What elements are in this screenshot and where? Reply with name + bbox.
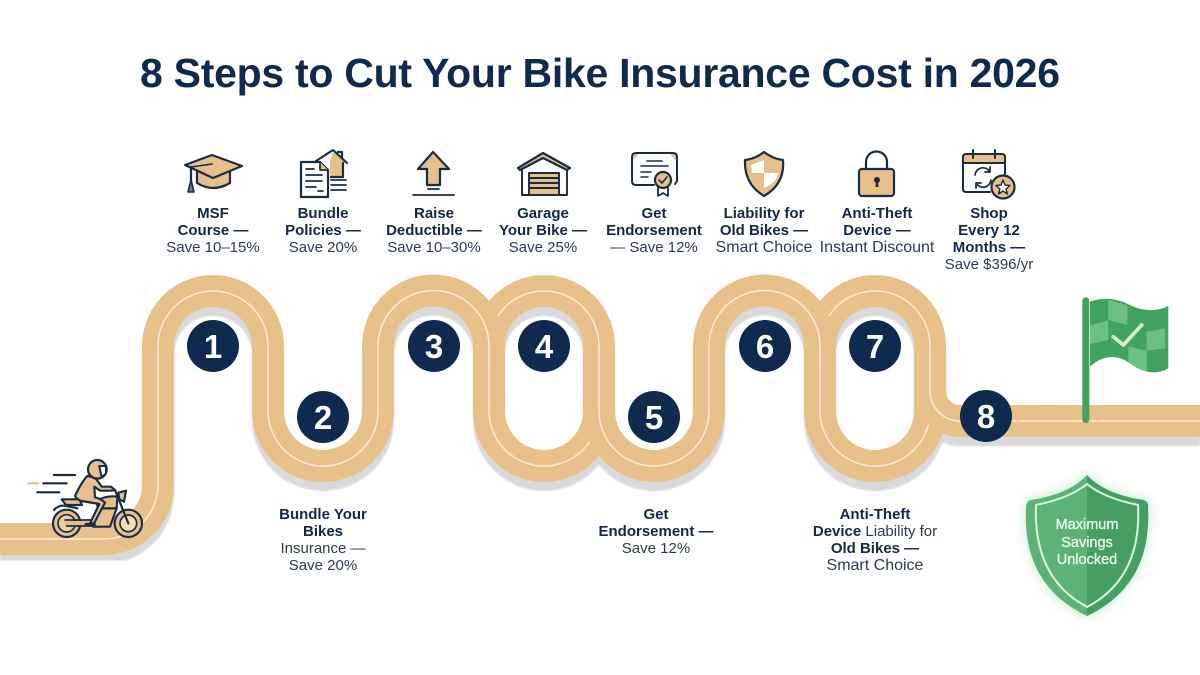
step marker 6 [739, 320, 791, 372]
label: step 5 top: Endorsement [606, 222, 702, 239]
label: step 3: Deductible — [386, 222, 482, 239]
step marker 7: 7 [866, 328, 884, 365]
label: anti-theft and liability: Anti-Theft [840, 506, 910, 523]
step marker 4: 4 [535, 328, 554, 365]
step marker 5: 5 [645, 399, 663, 436]
icon: finish flag [1082, 297, 1168, 423]
icon: garage [518, 153, 570, 195]
label: step 2 top: Policies — [285, 222, 361, 239]
step marker 3 [408, 320, 460, 372]
label: step 1: MSF [197, 205, 229, 222]
label: get endorsement: Save 12% [622, 540, 690, 557]
step marker 3: 3 [425, 328, 443, 365]
label: step 1: Course — [178, 222, 248, 239]
badge: maximum savings unlocked shield: Savings [1061, 535, 1113, 551]
icon: bundle policies [301, 150, 347, 197]
label: bundle your bikes: Insurance — [280, 540, 366, 557]
icon: calendar with star [963, 150, 1014, 198]
icon: motorcycle rider [28, 460, 142, 537]
label: step 2 top: Save 20% [289, 239, 357, 256]
label: step 7: Device — [843, 222, 911, 239]
label: step 6: Smart Choice [716, 239, 813, 256]
icon: liability shield [745, 152, 783, 196]
label: step 8: Months — [953, 239, 1025, 256]
step marker 4 [518, 320, 570, 372]
icon: endorsement certificate [632, 153, 677, 196]
label: anti-theft and liability: Smart Choice [827, 557, 924, 574]
label: get endorsement: Get [643, 506, 669, 523]
step marker 8 [960, 390, 1012, 442]
label: step 1: Save 10–15% [166, 239, 260, 256]
label: bundle your bikes: Bikes [303, 523, 343, 540]
label: step 2 top: Bundle [298, 205, 348, 222]
step marker 1 [187, 320, 239, 372]
icon: padlock [859, 152, 894, 196]
step marker 2: 2 [314, 399, 332, 436]
label: step 4: Save 25% [509, 239, 577, 256]
label: step 3: Raise [414, 205, 454, 222]
label: anti-theft and liability: Device Liability for [813, 523, 937, 540]
icon: raise deductible arrow [413, 152, 454, 195]
label: step 8: Every 12 [958, 222, 1020, 239]
step marker 5 [628, 391, 680, 443]
label: step 8: Shop [970, 205, 1008, 222]
label: step 5 top: — Save 12% [610, 239, 698, 256]
badge: maximum savings unlocked shield [1026, 475, 1148, 616]
step marker 6: 6 [756, 328, 774, 365]
label: get endorsement: Endorsement — [598, 523, 714, 540]
winding road [0, 290, 1200, 548]
step marker 7 [849, 320, 901, 372]
title: 8 Steps to Cut Your Bike Insurance Cost in 2026 [140, 50, 1060, 96]
label: bundle your bikes: Save 20% [289, 557, 357, 574]
badge: maximum savings unlocked shield: Maximum [1056, 517, 1118, 533]
label: anti-theft and liability: Old Bikes — [831, 540, 919, 557]
road shadow [0, 300, 1200, 548]
label: step 5 top: Get [641, 205, 667, 222]
label: step 3: Save 10–30% [387, 239, 481, 256]
step marker 1: 1 [204, 328, 222, 365]
label: step 4: Garage [517, 205, 569, 222]
step marker 8: 8 [977, 398, 995, 435]
step marker 2 [297, 391, 349, 443]
label: step 6: Old Bikes — [720, 222, 808, 239]
label: step 7: Anti-Theft [842, 205, 912, 222]
label: step 8: Save $396/yr [945, 256, 1033, 273]
label: bundle your bikes: Bundle Your [279, 506, 367, 523]
label: step 7: Instant Discount [820, 239, 935, 256]
label: step 4: Your Bike — [499, 222, 587, 239]
icon: graduation cap [185, 155, 242, 192]
badge: maximum savings unlocked shield: Unlocked [1057, 552, 1117, 568]
label: step 6: Liability for [724, 205, 805, 222]
